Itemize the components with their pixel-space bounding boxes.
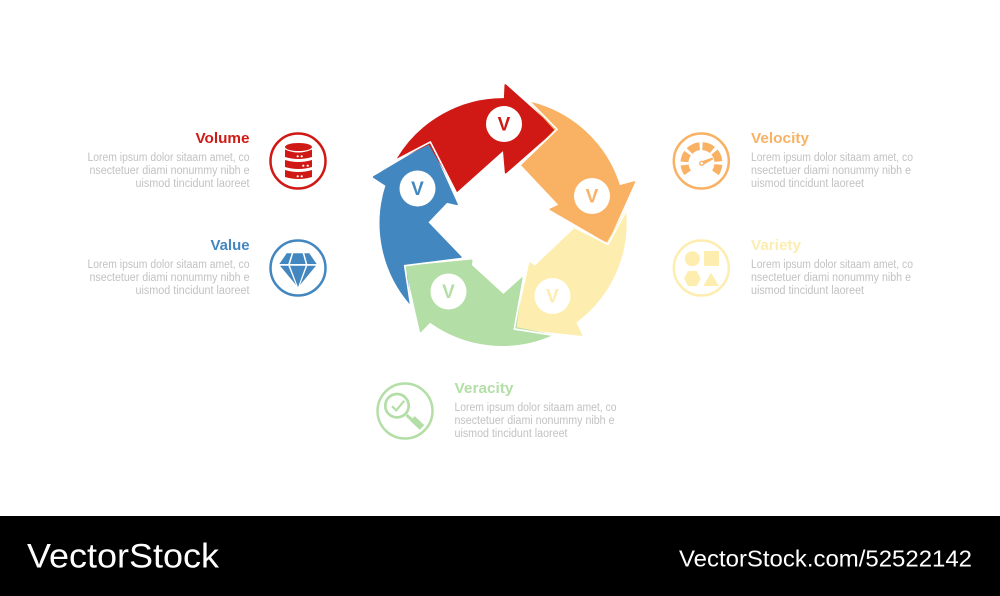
icon: database bbox=[270, 134, 326, 188]
badge: value V: V bbox=[411, 179, 424, 200]
text: value description bbox=[88, 259, 250, 297]
text: variety description: Lorem ipsum dolor sitaam amet, co bbox=[751, 259, 913, 271]
badge: volume V bbox=[486, 106, 522, 142]
block: variety bbox=[674, 238, 913, 297]
heading: veracity: Veracity bbox=[454, 381, 514, 397]
icon: speedometer bbox=[674, 134, 729, 188]
text: value description: nsectetuer diami nonummy nibh e bbox=[90, 272, 250, 284]
cycle diagram: five arrows bbox=[374, 85, 634, 345]
text: value description: Lorem ipsum dolor sitaam amet, co bbox=[88, 259, 250, 271]
arrow: variety yellow bbox=[516, 212, 626, 335]
text: veracity description: uismod tincidunt laoreet bbox=[454, 428, 568, 440]
footer url: VectorStock.com/52522142 bbox=[679, 546, 972, 572]
block: velocity bbox=[674, 131, 913, 190]
block: value bbox=[88, 238, 326, 297]
text: veracity description bbox=[454, 402, 616, 440]
text: variety description bbox=[751, 259, 913, 297]
text: variety description: uismod tincidunt laoreet bbox=[751, 285, 865, 297]
heading: volume: Volume bbox=[196, 131, 250, 147]
badge: veracity V: V bbox=[442, 282, 455, 303]
text: veracity description: nsectetuer diami nonummy nibh e bbox=[454, 415, 614, 427]
heading: variety: Variety bbox=[751, 238, 801, 254]
arrow: value blue bbox=[374, 144, 461, 303]
text: volume description: nsectetuer diami nonummy nibh e bbox=[90, 165, 250, 177]
text: veracity description: Lorem ipsum dolor sitaam amet, co bbox=[454, 402, 616, 414]
arrow: velocity orange bbox=[522, 103, 634, 242]
block: veracity bbox=[378, 381, 616, 440]
badge: volume V: V bbox=[498, 114, 511, 136]
icon: shapes bbox=[674, 240, 729, 296]
badge: variety V bbox=[534, 278, 570, 314]
arrow: volume red bbox=[398, 85, 555, 191]
badge: velocity V: V bbox=[586, 186, 599, 208]
text: value description: uismod tincidunt laoreet bbox=[136, 285, 250, 297]
text: velocity description bbox=[751, 152, 913, 190]
badge: veracity V bbox=[430, 274, 466, 310]
text: velocity description: Lorem ipsum dolor sitaam amet, co bbox=[751, 152, 913, 164]
badge: variety V: V bbox=[546, 286, 559, 308]
text: velocity description: nsectetuer diami nonummy nibh e bbox=[751, 165, 911, 177]
text: variety description: nsectetuer diami nonummy nibh e bbox=[751, 272, 911, 284]
text: velocity description: uismod tincidunt laoreet bbox=[751, 178, 865, 190]
text: volume description: Lorem ipsum dolor sitaam amet, co bbox=[88, 152, 250, 164]
icon: magnifier with check bbox=[378, 384, 432, 438]
text: volume description bbox=[88, 152, 250, 190]
footer bar bbox=[0, 516, 1000, 596]
block: volume bbox=[88, 131, 326, 190]
badge: value V bbox=[400, 170, 436, 206]
arrow: veracity green bbox=[406, 260, 551, 345]
heading: velocity: Velocity bbox=[751, 131, 809, 147]
footer logo: VectorStock bbox=[27, 538, 220, 576]
text: volume description: uismod tincidunt laoreet bbox=[136, 178, 250, 190]
badge: velocity V bbox=[574, 178, 610, 214]
heading: value: Value bbox=[210, 238, 250, 254]
icon: diamond bbox=[270, 240, 326, 296]
